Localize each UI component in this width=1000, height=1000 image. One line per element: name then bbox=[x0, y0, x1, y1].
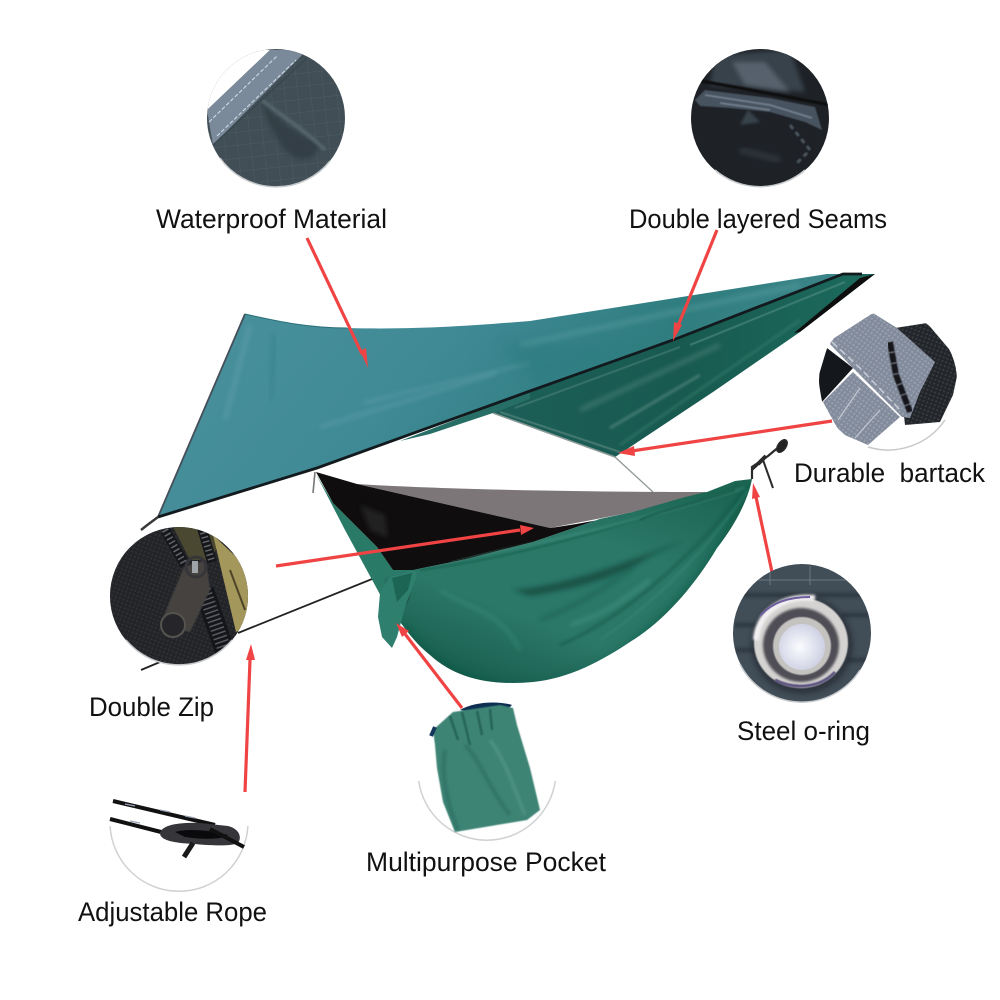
panel: steel o-ring bbox=[730, 562, 874, 746]
hanging cord and carabiner bbox=[313, 438, 789, 493]
panel: multipurpose pocket bbox=[366, 702, 606, 877]
panel: double layered seams bbox=[629, 48, 887, 234]
detail photo: rope tensioner bbox=[110, 801, 248, 891]
detail photo: stuff sack bbox=[419, 702, 555, 840]
tarp top face bbox=[141, 274, 862, 530]
illustration: hammock and tarp bbox=[141, 274, 875, 700]
heading: Adjustable Rope bbox=[78, 897, 267, 927]
panel: adjustable rope bbox=[78, 801, 267, 927]
hammock left strip bbox=[316, 474, 420, 600]
arrow: double zip bbox=[276, 525, 534, 566]
tarp guy line bbox=[615, 457, 653, 492]
heading: Double Zip bbox=[89, 692, 214, 722]
arrow: steel o-ring bbox=[752, 483, 772, 572]
panel: durable bartack bbox=[794, 313, 985, 488]
detail photo: metal grommet bbox=[730, 562, 874, 706]
panel: waterproof material bbox=[156, 45, 387, 234]
heading: Multipurpose Pocket bbox=[366, 847, 606, 877]
arrow: adjustable rope bbox=[245, 644, 255, 792]
hammock rope bbox=[141, 571, 392, 670]
detail photo: fabric with hem bbox=[207, 49, 345, 186]
heading: Waterproof Material bbox=[156, 204, 387, 234]
tarp underside bbox=[493, 274, 875, 460]
heading: Double layered Seams bbox=[629, 204, 887, 234]
arrow: durable bartack bbox=[618, 421, 832, 456]
feature arrows bbox=[245, 230, 832, 792]
detail photo: dark seam bbox=[690, 48, 830, 188]
detail photo: zipper pull bbox=[108, 525, 250, 667]
hammock black mesh bbox=[316, 472, 633, 570]
stuff pocket bbox=[378, 570, 417, 648]
hammock body bbox=[384, 479, 752, 683]
heading: Steel o-ring bbox=[737, 716, 870, 746]
arrow: double layered seams bbox=[673, 230, 717, 341]
arrow: waterproof material bbox=[307, 238, 368, 368]
hammock grey canopy bbox=[357, 484, 707, 528]
heading: Durable bartack bbox=[794, 458, 985, 488]
panel: double zip bbox=[89, 525, 250, 722]
detail photo: webbing strap bbox=[818, 313, 960, 445]
arrow: multipurpose pocket bbox=[396, 623, 462, 708]
